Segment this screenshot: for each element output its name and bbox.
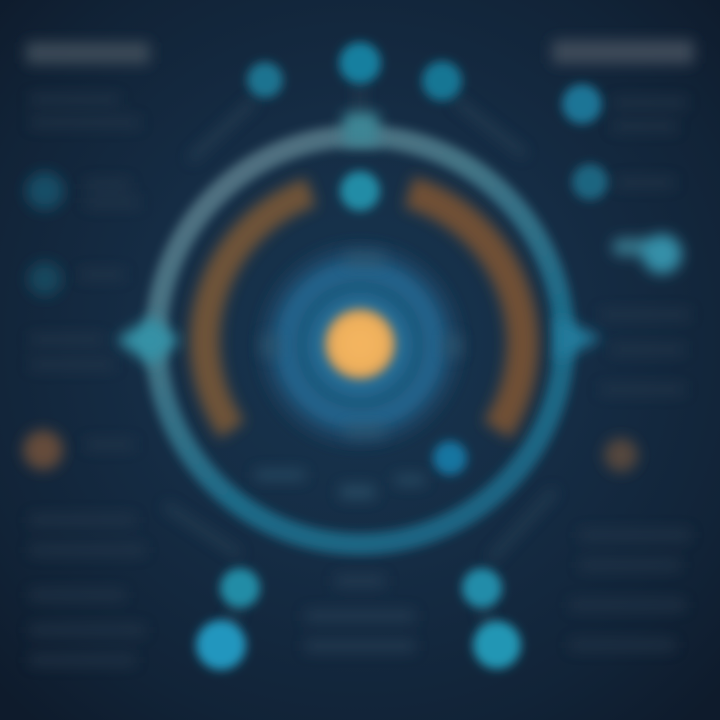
panel: right column placeholder text [570,98,690,650]
outer ring [156,136,564,544]
panel: bottom centre placeholder text [305,575,415,652]
icon: left middle node [28,262,62,296]
heading: right title bar [552,40,694,64]
heading: left title bar [26,42,150,64]
icon: lower right inner node [433,441,467,475]
icon: top right node [422,61,462,101]
central concentric rings [260,245,460,445]
icon: ring right diamond [556,316,602,362]
icon: bottom left lower node [196,620,246,670]
icon: ring left diamond [116,316,180,366]
icon: bottom left upper node [220,568,260,608]
icon: bottom right lower node [473,621,521,669]
icon: right upper node [562,84,602,124]
icon: right middle node [572,164,608,200]
icon: left orange node [23,430,63,470]
orange arc left [205,192,311,430]
connector lines [165,85,555,640]
panel: left column placeholder text [30,95,145,665]
icon: top left node [247,62,283,98]
icon: inner top node [340,171,380,211]
icon: right orange node [604,438,638,472]
icon: right callout pill [612,234,682,274]
central orange core [324,308,396,380]
icon: top centre node [339,42,381,84]
orange arc right [409,192,523,430]
icon: left upper node [26,172,64,210]
small inner ticks around the core [255,252,461,499]
icon: ring top connector [343,112,379,146]
icon: bottom right upper node [462,568,502,608]
